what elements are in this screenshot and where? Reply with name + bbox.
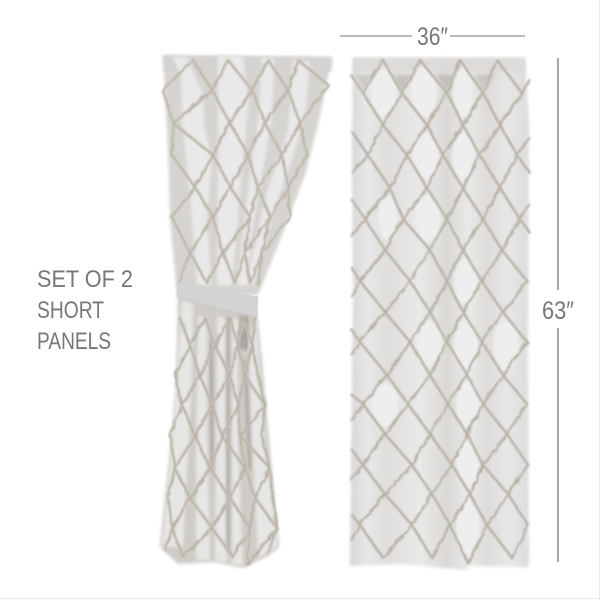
side label: set of 2 short panels: SET OF 2 xyxy=(37,266,133,293)
left upper lattice xyxy=(163,60,328,285)
top rod pocket xyxy=(353,58,525,92)
width dimension: 36 inches: 36″ xyxy=(417,23,448,51)
left curtain lower section xyxy=(160,290,279,568)
tieback band xyxy=(177,282,258,317)
right curtain flat xyxy=(350,58,529,570)
dark fold gaps xyxy=(211,316,250,552)
side label: set of 2 short panels: SHORT xyxy=(37,297,104,324)
side label: set of 2 short panels xyxy=(37,266,133,355)
left lower lattice xyxy=(165,318,277,565)
left curtain upper section xyxy=(163,55,332,295)
diamond lattice xyxy=(352,60,529,563)
right curtain fabric xyxy=(350,58,529,570)
side label: set of 2 short panels: PANELS xyxy=(37,328,111,355)
height dimension: 63 inches: 63″ xyxy=(542,297,574,325)
white lozenge highlights xyxy=(371,66,519,554)
left curtain tied back xyxy=(160,55,332,568)
